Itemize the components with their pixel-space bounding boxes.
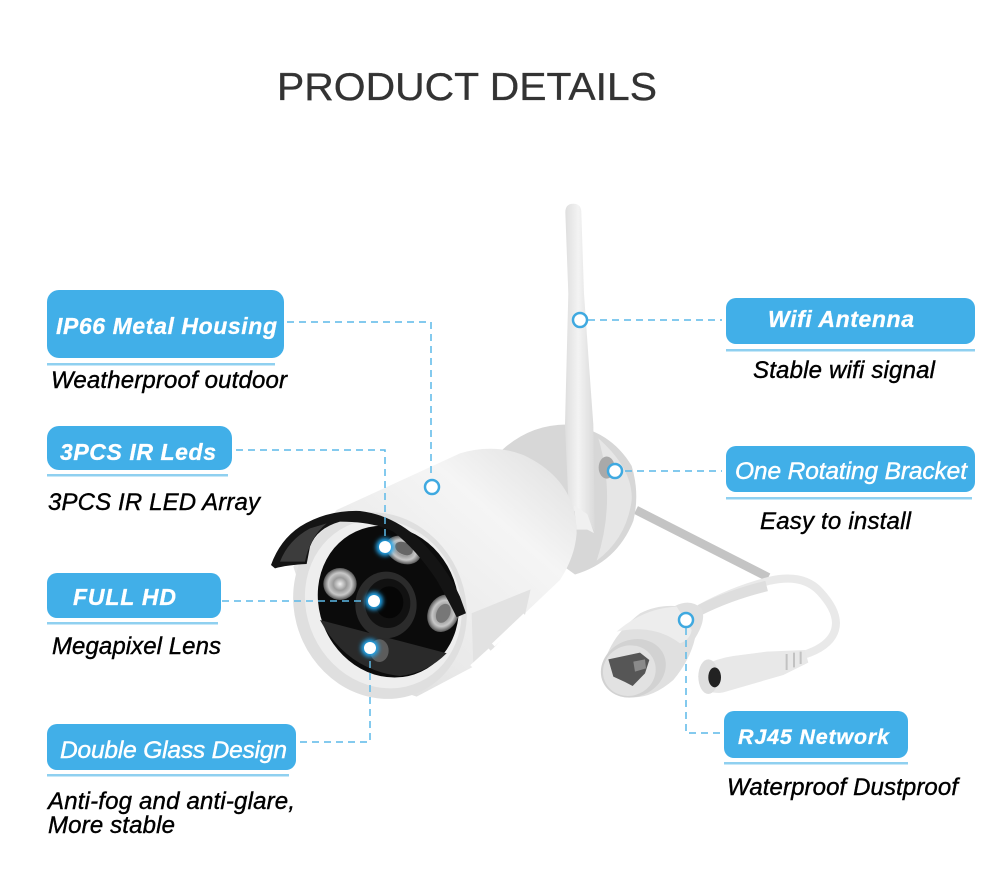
body shell xyxy=(293,449,577,697)
RJ45 connector xyxy=(591,603,703,708)
IR LED right xyxy=(421,589,465,637)
callout: One Rotating Bracket: Easy to install xyxy=(760,508,912,535)
underside panel xyxy=(472,589,531,667)
visor xyxy=(271,511,466,617)
callout: Wifi Antenna xyxy=(573,298,975,384)
wall bracket xyxy=(502,424,636,574)
front rim xyxy=(263,484,497,728)
callout: FULL HD: Megapixel Lens xyxy=(52,633,221,660)
callout: FULL HD: FULL HD xyxy=(73,584,176,610)
lens xyxy=(355,572,417,638)
callout: RJ45 Network xyxy=(679,613,960,801)
callout: Double Glass Design xyxy=(46,639,379,839)
sensor xyxy=(370,639,389,662)
leader line xyxy=(287,322,431,478)
callout: One Rotating Bracket: One Rotating Bracket xyxy=(735,458,968,485)
camera illustration xyxy=(263,204,836,728)
black face xyxy=(293,502,484,701)
callout: IP66 Metal Housing: IP66 Metal Housing xyxy=(56,313,277,339)
callout: IP66 Metal Housing xyxy=(47,290,439,494)
grey cable xyxy=(636,510,768,577)
callout: Wifi Antenna: Wifi Antenna xyxy=(768,306,914,332)
antenna xyxy=(565,204,595,531)
network and power cable xyxy=(591,510,836,708)
white cable xyxy=(700,579,836,655)
callout: Double Glass Design: Anti-fog and anti-glare, xyxy=(46,788,295,815)
callout: 3PCS IR Leds: 3PCS IR LED Array xyxy=(48,489,262,516)
IR LED left xyxy=(323,568,357,600)
callout: RJ45 Network: Waterproof Dustproof xyxy=(727,774,960,801)
callout: Double Glass Design: Double Glass Design xyxy=(60,737,287,764)
callout: RJ45 Network: RJ45 Network xyxy=(738,725,890,749)
bracket and antenna xyxy=(502,204,636,574)
power plug xyxy=(698,650,808,694)
callout: IP66 Metal Housing: Weatherproof outdoor xyxy=(51,367,288,394)
camera body and front xyxy=(263,449,577,728)
callout: Wifi Antenna: Stable wifi signal xyxy=(753,357,936,384)
title: PRODUCT DETAILS xyxy=(277,66,657,109)
callout: 3PCS IR Leds: 3PCS IR Leds xyxy=(60,439,216,465)
callout: FULL HD xyxy=(47,573,383,660)
callout: 3PCS IR Leds xyxy=(47,426,394,556)
label box xyxy=(47,290,284,358)
callout: Double Glass Design: More stable xyxy=(48,812,175,839)
IR LED top xyxy=(381,530,426,570)
callout: One Rotating Bracket xyxy=(608,446,975,535)
